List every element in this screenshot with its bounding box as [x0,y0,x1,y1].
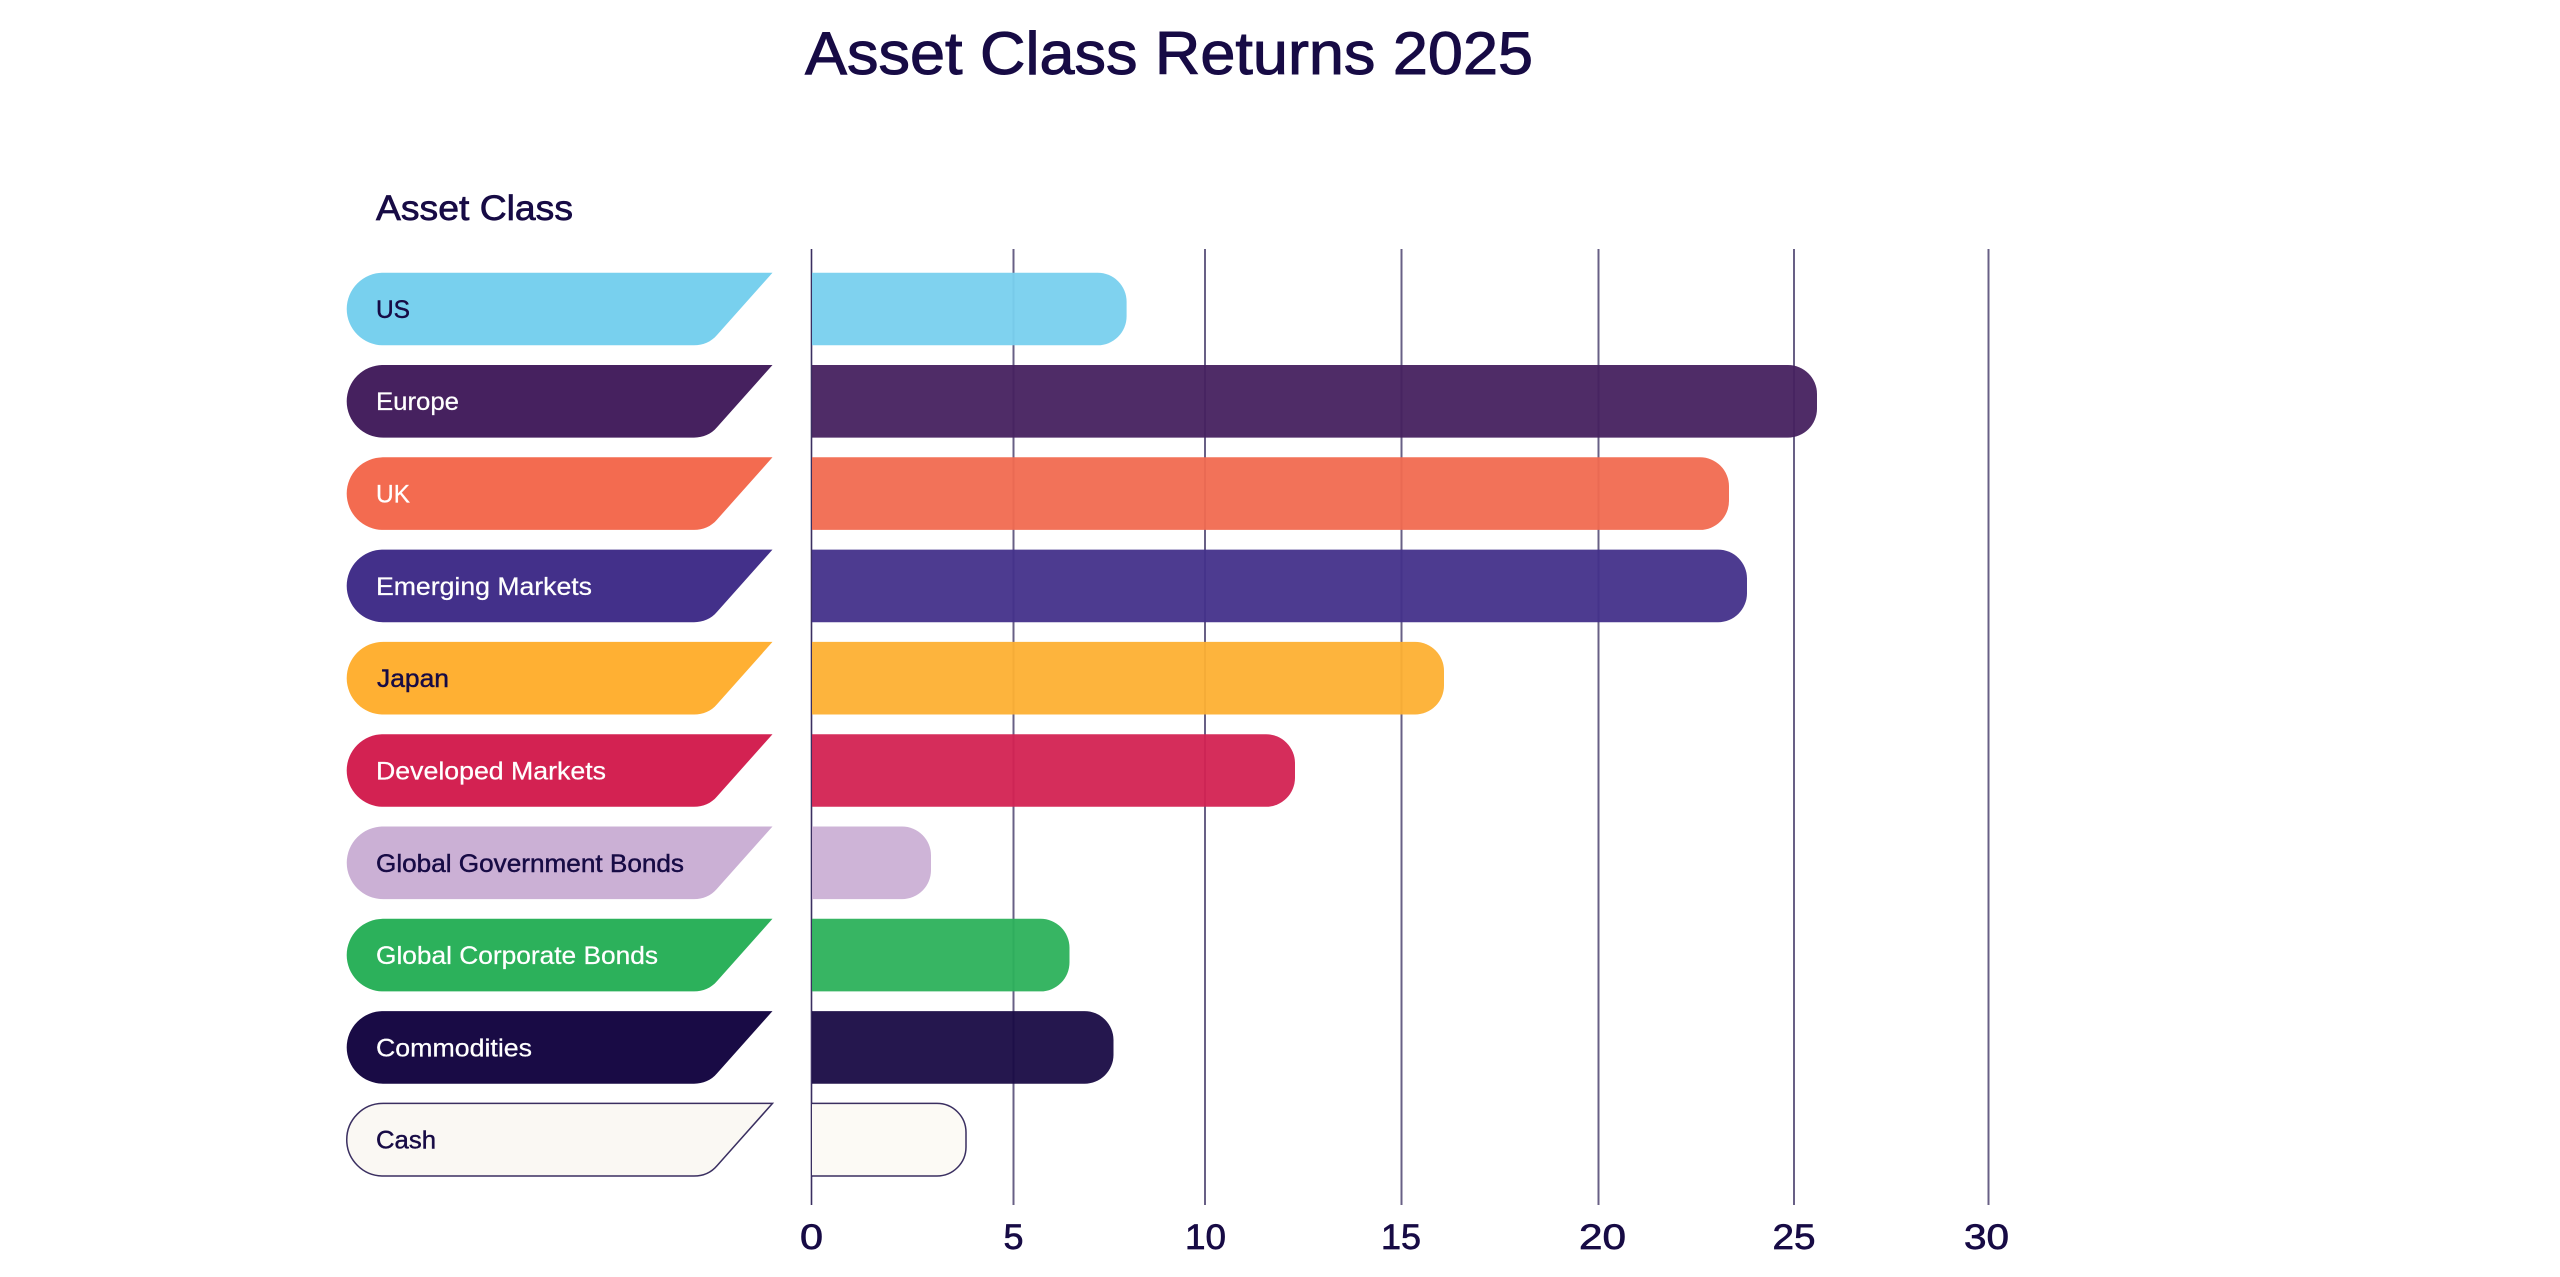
row: Developed Markets: Developed Markets [376,758,606,786]
row: Japan: Japan [377,665,449,693]
row: UK: UK [376,481,410,509]
row: Global Corporate Bonds: Global Corporate Bonds [376,942,658,970]
row: Emerging Markets [347,550,1747,622]
row: Japan [347,642,1444,714]
row: US: US [376,296,410,324]
row: Global Government Bonds [347,826,931,899]
vertical grid lines [1014,249,1988,1205]
row: Global Government Bonds: Global Government Bonds [376,850,684,878]
x axis labels: 5 [1004,1218,1024,1257]
title: Asset Class Returns 2025 [805,20,1533,87]
row: Commodities: Commodities [376,1034,532,1062]
axis heading: Asset Class: Asset Class [376,189,573,228]
x axis labels: 10 [1185,1218,1226,1257]
x axis labels: 20 [1579,1218,1626,1257]
row: Europe [347,365,1817,438]
x axis labels: 0 [800,1218,823,1257]
row: Cash: Cash [376,1127,436,1155]
x axis labels: 15 [1381,1218,1421,1257]
row: Cash [347,1103,966,1176]
row: Global Corporate Bonds [347,919,1070,991]
x axis labels [800,1218,2009,1257]
row: Europe: Europe [376,388,459,416]
x axis labels: 30 [1964,1218,2009,1257]
row: US [347,273,1127,345]
row: Developed Markets [347,734,1295,807]
zero axis line [810,249,812,1205]
row: Commodities [347,1011,1114,1084]
row: Emerging Markets: Emerging Markets [376,573,592,601]
row: UK [347,457,1729,530]
x axis labels: 25 [1772,1218,1816,1257]
